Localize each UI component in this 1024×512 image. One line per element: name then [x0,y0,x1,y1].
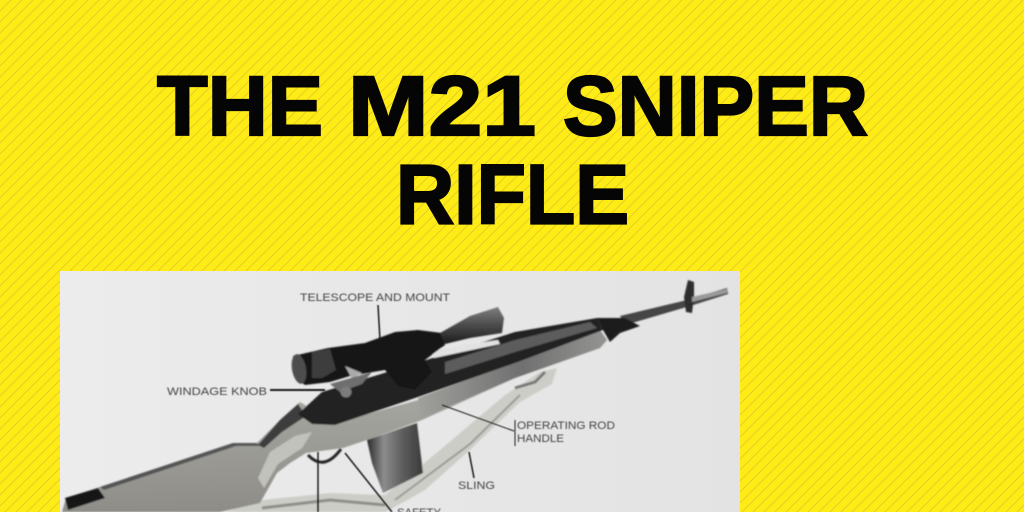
sling [225,368,557,512]
windage knob [340,386,352,398]
scope [293,330,445,390]
title [157,59,868,242]
leader lines [270,305,515,512]
objective bell [440,307,504,344]
title: SNIPER [563,59,868,153]
callout labels: OPERATING ROD [517,420,615,432]
callout labels [167,292,615,512]
callout labels: WINDAGE KNOB [167,386,267,398]
barrel and bayonet [620,288,728,325]
callout labels: TELESCOPE AND MOUNT [300,292,450,304]
stock [62,330,607,512]
magazine [367,423,423,493]
trigger guard [308,449,341,462]
title: RIFLE [396,148,629,242]
butt plate [65,488,105,510]
callout labels: SLING [458,480,495,492]
fore-end [418,328,607,418]
callout labels: HANDLE [517,433,564,445]
flash hider [597,318,640,342]
rifle photograph panel [60,271,740,512]
icon: rifle illustration [62,280,728,512]
receiver and handguard [298,318,603,425]
title: THE [157,59,323,153]
title: M21 [348,59,536,153]
